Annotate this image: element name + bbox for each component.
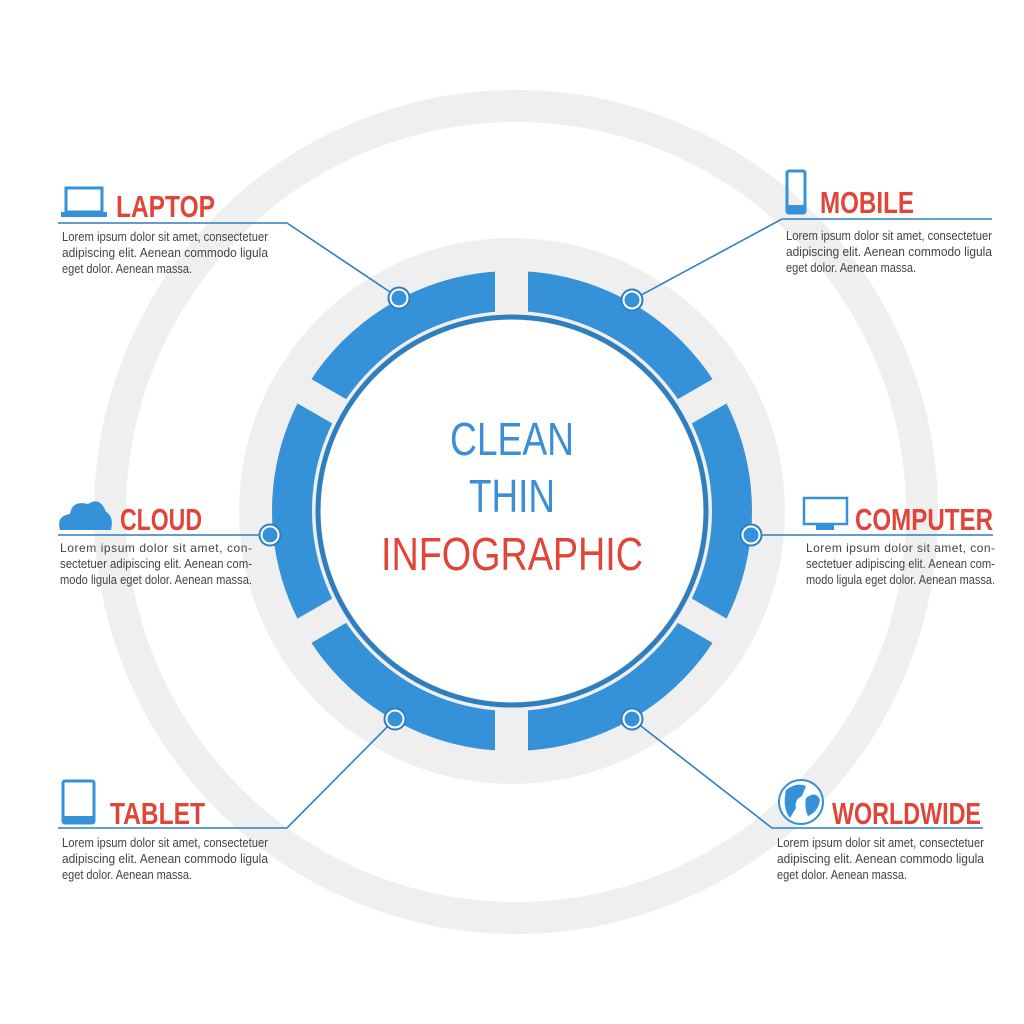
panel: tablet: eget dolor. Aenean massa.: [62, 868, 192, 882]
center white disk: [321, 320, 703, 702]
center title: [381, 413, 643, 580]
panel: mobile: Lorem ipsum dolor sit amet, consectetuer: [786, 229, 992, 243]
panel: laptop: eget dolor. Aenean massa.: [62, 262, 192, 276]
blue segmented ring: [292, 291, 732, 731]
icon: laptop: [61, 188, 107, 217]
panel: cloud: modo ligula eget dolor. Aenean massa.: [60, 573, 252, 587]
markers: [261, 289, 760, 728]
thin blue circle: [318, 317, 706, 705]
panel: tablet: [62, 781, 268, 882]
panel: laptop: adipiscing elit. Aenean commodo ligula: [62, 246, 268, 260]
panel: mobile: MOBILE: [820, 185, 914, 220]
panel: worldwide: adipiscing elit. Aenean commodo ligula: [777, 852, 984, 866]
panel: worldwide: eget dolor. Aenean massa.: [777, 868, 907, 882]
panel: computer: [804, 498, 995, 587]
icon: tablet: [63, 781, 94, 823]
center title: THIN: [469, 470, 555, 522]
panel: mobile: eget dolor. Aenean massa.: [786, 261, 916, 275]
panel: computer: modo ligula eget dolor. Aenean massa.: [806, 573, 995, 587]
panel: cloud: Lorem ipsum dolor sit amet, con-: [60, 541, 252, 555]
panel: cloud: sectetuer adipiscing elit. Aenean com-: [60, 557, 252, 571]
panel: laptop: LAPTOP: [116, 189, 215, 224]
panel: tablet: Lorem ipsum dolor sit amet, consectetuer: [62, 836, 268, 850]
panel: computer: Lorem ipsum dolor sit amet, con-: [806, 541, 995, 555]
panel: cloud: CLOUD: [120, 502, 202, 537]
panel: mobile: adipiscing elit. Aenean commodo ligula: [786, 245, 992, 259]
center title: CLEAN: [450, 413, 574, 465]
panel: worldwide: Lorem ipsum dolor sit amet, consectetuer: [777, 836, 984, 850]
panel: laptop: [61, 188, 268, 276]
center title: INFOGRAPHIC: [381, 528, 643, 580]
panel: computer: sectetuer adipiscing elit. Aenean com-: [806, 557, 995, 571]
icon: computer: [804, 498, 847, 530]
icon: cloud: [59, 501, 112, 530]
icon: mobile: [787, 171, 805, 213]
inner gray disk: [239, 238, 785, 784]
panel: cloud: [59, 501, 252, 587]
icon: globe: [779, 780, 823, 824]
panel: mobile: [786, 171, 992, 275]
panel: tablet: adipiscing elit. Aenean commodo ligula: [62, 852, 268, 866]
panel: tablet: TABLET: [110, 796, 205, 831]
outer gray ring: [110, 106, 922, 918]
panel: worldwide: [777, 780, 984, 882]
connector lines: [58, 219, 993, 828]
panel: laptop: Lorem ipsum dolor sit amet, consectetuer: [62, 230, 268, 244]
